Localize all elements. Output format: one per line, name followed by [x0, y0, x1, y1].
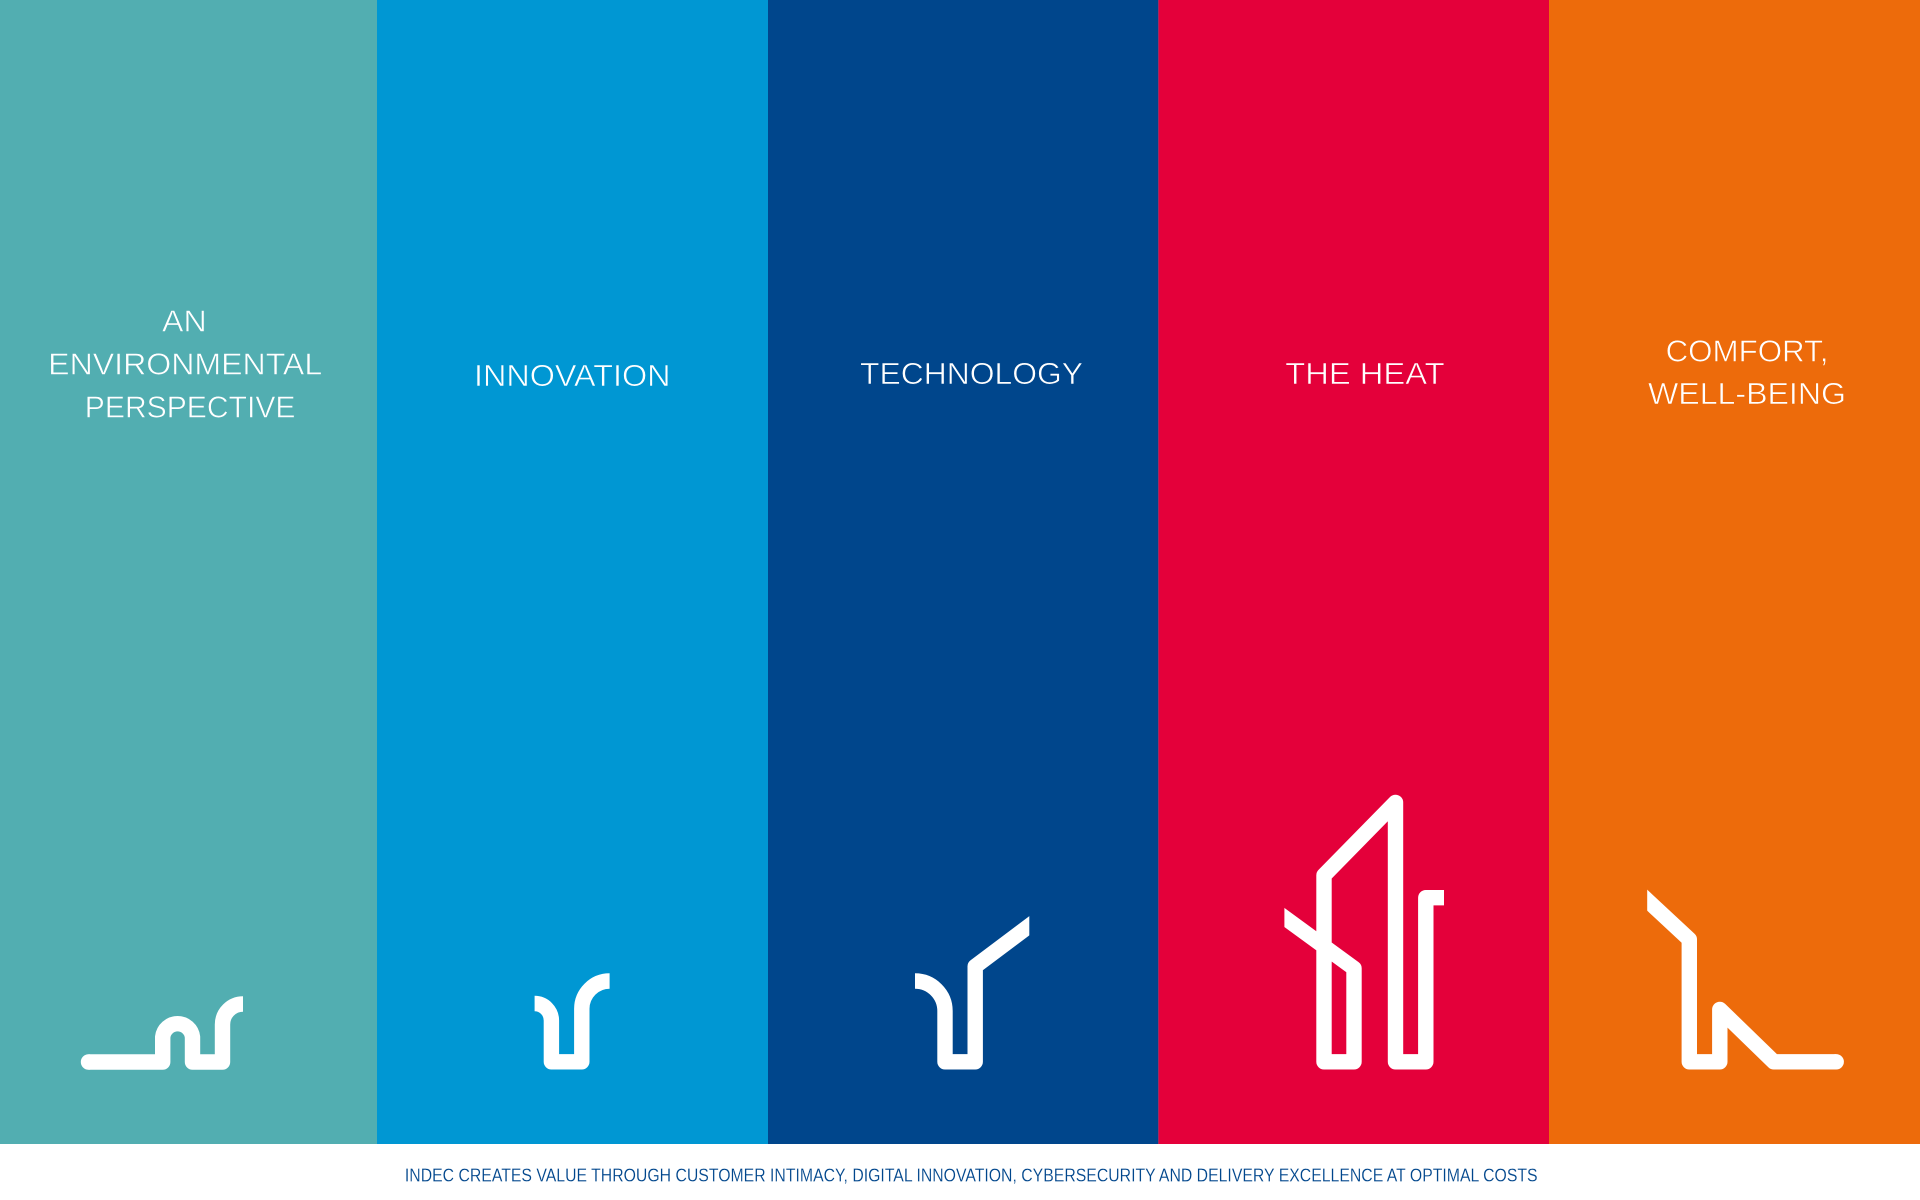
panel: an environmental perspective [0, 0, 377, 1144]
heading: an environmental perspective: PERSPECTIVE [85, 389, 296, 424]
icon: tall building pipe [1278, 802, 1444, 1062]
heading: an environmental perspective: ENVIRONMENTAL [48, 346, 322, 381]
heading: comfort, well-being [1648, 333, 1846, 411]
icon: descending pipe [1640, 894, 1844, 1070]
heading: an environmental perspective: AN [162, 304, 207, 339]
icon: short pipe [535, 981, 610, 1062]
heading: the heat: THE HEAT [1285, 356, 1445, 391]
icon: low pipe line [81, 1004, 243, 1070]
panel: technology [768, 0, 1158, 1144]
panel: the heat [1158, 0, 1549, 1144]
heading: comfort, well-being: COMFORT, [1666, 333, 1828, 368]
icon: pipe with angled arm [915, 921, 1036, 1062]
panel: comfort, well-being [1549, 0, 1920, 1144]
panel: innovation [377, 0, 768, 1144]
footer tagline: INDEC CREATES VALUE THROUGH CUSTOMER INTIMACY, DIGITAL INNOVATION, CYBERSECURITY AND DELIVERY EXCELLENCE AT OPTIMAL COSTS [405, 1164, 1538, 1186]
heading: an environmental perspective [48, 304, 322, 424]
heading: comfort, well-being: WELL-BEING [1648, 376, 1846, 411]
heading: innovation: INNOVATION [474, 358, 670, 393]
heading: technology: TECHNOLOGY [860, 356, 1083, 391]
